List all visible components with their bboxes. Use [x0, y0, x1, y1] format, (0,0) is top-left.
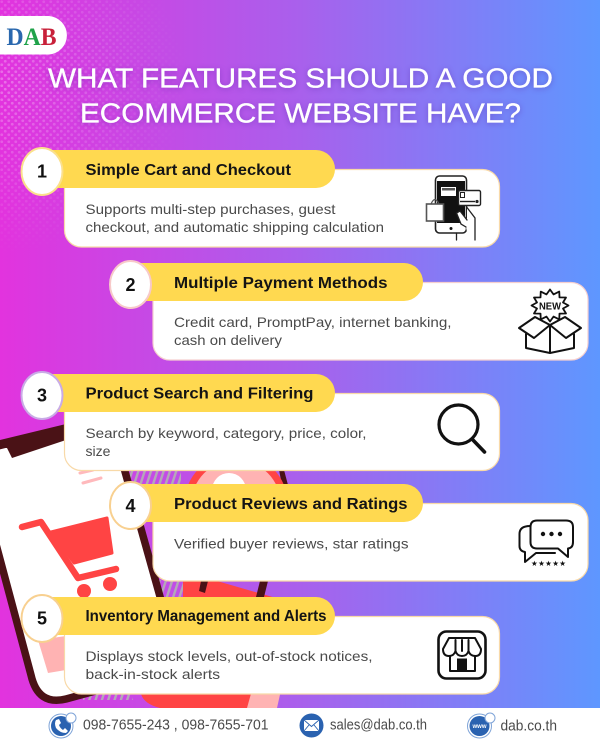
body 1	[86, 201, 384, 235]
halftone dots	[0, 0, 159, 229]
number badge 4: 4	[125, 496, 136, 516]
number badge 5	[22, 595, 62, 642]
heading bar 2	[138, 263, 423, 301]
phone notch	[0, 424, 72, 458]
phone numbers: 098-7655-243 , 098-7655-701	[83, 718, 268, 734]
body 5: back-in-stock alerts	[86, 666, 220, 682]
panel: feature 3	[22, 372, 500, 470]
heading 2: Multiple Payment Methods	[174, 275, 388, 292]
cart icon	[22, 518, 117, 598]
number badge 5: 5	[37, 608, 47, 628]
body 5	[86, 648, 372, 682]
number badge 3	[22, 372, 62, 419]
footer band	[0, 708, 600, 750]
title	[48, 62, 553, 128]
number badge 1: 1	[37, 162, 47, 182]
panel: feature 1	[22, 148, 500, 247]
body 2: Credit card, PromptPay, internet banking,	[174, 314, 452, 330]
card 2	[153, 282, 588, 360]
body 3: Search by keyword, category, price, color,	[86, 425, 366, 441]
heading bar 4	[138, 484, 423, 522]
body 1: Supports multi-step purchases, guest	[86, 201, 336, 217]
card 5	[64, 616, 500, 694]
icon: storefront	[438, 632, 486, 678]
heading 4: Product Reviews and Ratings	[174, 496, 408, 513]
heading 1: Simple Cart and Checkout	[86, 162, 292, 179]
icon: phone with card and bag	[426, 176, 480, 240]
email: sales@dab.co.th	[330, 718, 427, 734]
card 4	[153, 504, 588, 581]
card 3	[64, 394, 500, 470]
footer	[0, 708, 600, 750]
icon: chat bubbles with stars: ★★★★★	[531, 559, 566, 568]
hatch shading	[83, 471, 184, 700]
red bag body	[141, 581, 281, 708]
icon: magnifier	[439, 405, 484, 452]
body 2	[174, 314, 452, 348]
panel: feature 4	[110, 482, 588, 581]
body 4: Verified buyer reviews, star ratings	[174, 536, 408, 552]
body 3: size	[86, 443, 111, 459]
title: WHAT FEATURES SHOULD A GOOD	[48, 62, 553, 94]
panel: feature 2	[110, 261, 588, 360]
title: ECOMMERCE WEBSITE HAVE?	[80, 98, 521, 128]
icon: chat bubbles with stars	[520, 520, 573, 568]
icon: new box: NEW	[539, 300, 561, 312]
red sticker with logo	[184, 453, 288, 557]
phone body	[0, 418, 180, 700]
body 2: cash on delivery	[174, 332, 282, 348]
icon: mail	[300, 714, 324, 738]
number badge 3: 3	[37, 386, 47, 406]
phone screen lines	[80, 470, 101, 483]
body 5: Displays stock levels, out-of-stock notices,	[86, 648, 372, 664]
heading 5: Inventory Management and Alerts	[86, 608, 327, 625]
logo text: DAB	[6, 24, 56, 51]
card 1	[64, 170, 500, 247]
number badge 4	[110, 482, 151, 529]
icon: phone	[49, 713, 76, 738]
pink phone block	[38, 636, 66, 673]
website: dab.co.th	[500, 718, 557, 734]
panel: feature 5	[22, 595, 500, 694]
number badge 2	[110, 261, 151, 308]
icon: website: www	[472, 724, 487, 730]
icon: website	[468, 713, 495, 738]
number badge 1	[22, 148, 62, 195]
heading bar 1	[50, 150, 335, 188]
icon: new box	[519, 290, 581, 353]
number badge 2: 2	[125, 275, 136, 295]
heading bar 5	[50, 597, 335, 635]
heading bar 3	[50, 374, 335, 412]
body 3	[86, 425, 366, 459]
heading 3: Product Search and Filtering	[86, 386, 314, 402]
logo badge	[0, 16, 67, 54]
body 1: checkout, and automatic shipping calculation	[86, 219, 384, 235]
illustration: shopping phone and bag	[0, 418, 288, 708]
